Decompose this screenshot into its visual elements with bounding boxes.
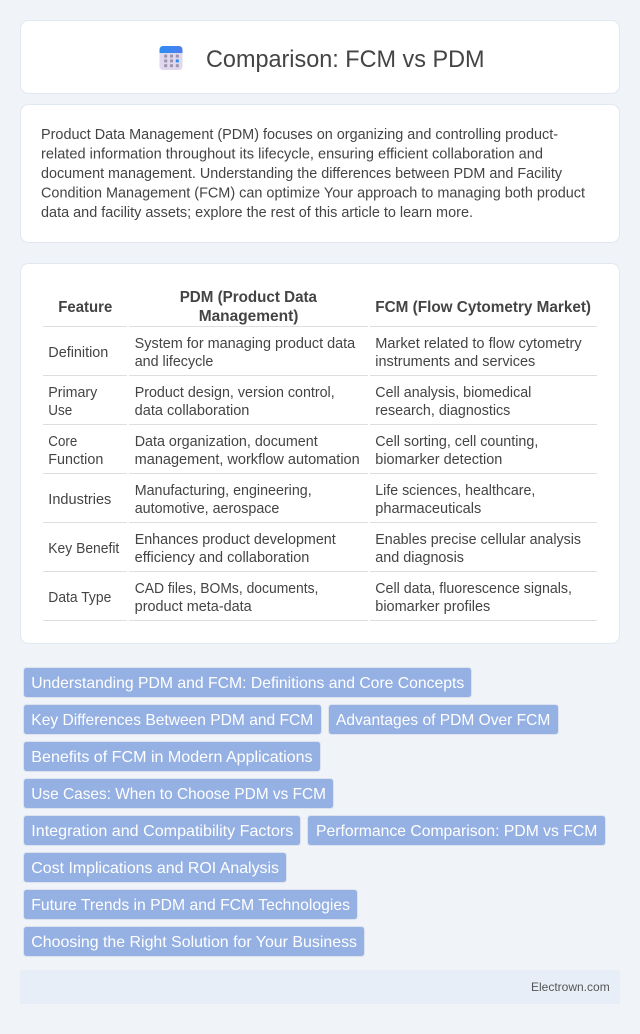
table row: Industries: Manufacturing, engineering, [135, 483, 312, 499]
footer: Electrown.com [531, 980, 610, 994]
table row: Primary Use: data collaboration [135, 403, 249, 419]
tag: key differences: Key Differences Between PDM and FCM [31, 712, 313, 729]
table header row: Management) [199, 308, 298, 325]
icon: calendar [160, 46, 182, 70]
tag: definitions [24, 668, 472, 698]
table row: Core Function: Cell sorting, cell counting, [375, 434, 538, 450]
tag: future trends: Future Trends in PDM and FCM Technologies [31, 897, 350, 914]
table row: Definition: Definition [48, 345, 108, 361]
table row: Core Function: management, workflow automation [135, 452, 360, 468]
table row: Definition: instruments and services [375, 354, 535, 370]
table row: Key Benefit: Key Benefit [48, 541, 119, 557]
title: Comparison: FCM vs PDM [206, 46, 484, 73]
table row: Key Benefit: Enables precise cellular analysis [375, 532, 581, 548]
table header row: PDM (Product Data [180, 289, 317, 306]
footer [20, 970, 620, 1004]
tag: integration: Integration and Compatibility Factors [31, 823, 293, 840]
tag: benefits: Benefits of FCM in Modern Applications [31, 749, 313, 766]
tag: key differences [24, 704, 322, 734]
panel: introduction [20, 104, 620, 242]
table row: Core Function: biomarker detection [375, 452, 502, 468]
table row: Core Function: Data organization, document [135, 434, 318, 450]
text block: intro paragraph: data and facility assets; explore the rest of this article to learn more. [41, 204, 473, 221]
table header row: FCM (Flow Cytometry Market) [375, 299, 591, 316]
table row: Primary Use: Primary [48, 385, 98, 401]
tag: integration [24, 816, 300, 846]
table row: Definition: Market related to flow cytometry [375, 336, 582, 352]
table row: Data Type: Data Type [48, 590, 111, 606]
panel: comparison table [20, 264, 620, 644]
tag: future trends [24, 890, 358, 920]
tag: performance: Performance Comparison: PDM vs FCM [316, 823, 597, 840]
tag: choosing [24, 926, 364, 956]
text block: intro paragraph: Condition Management (FCM) can optimize Your approach to managing both product [41, 184, 586, 202]
tag: performance [308, 816, 606, 846]
tag: advantages: Advantages of PDM Over FCM [336, 712, 550, 729]
table row: Key Benefit: efficiency and collaboration [135, 550, 309, 566]
table row: Data Type [48, 581, 572, 615]
table row: Core Function: Core [48, 434, 77, 450]
table row: Core Function [48, 434, 538, 468]
table row: Data Type: CAD files, BOMs, documents, [135, 581, 318, 597]
table row: Definition: System for managing product data [135, 336, 355, 352]
topic tags [24, 668, 606, 956]
table header row: Feature [58, 299, 112, 316]
tag: cost: Cost Implications and ROI Analysis [31, 860, 279, 877]
table row: Key Benefit: and diagnosis [375, 550, 464, 566]
tag: use cases: Use Cases: When to Choose PDM vs FCM [31, 786, 326, 803]
table row: Definition [48, 336, 582, 370]
table row: Primary Use: Product design, version control, [135, 385, 335, 401]
text block: intro paragraph: Product Data Management (PDM) focuses on organizing and controlling product- [41, 126, 558, 143]
tag: definitions: Understanding PDM and FCM: Definitions and Core Concepts [31, 675, 464, 692]
tag: choosing: Choosing the Right Solution for Your Business [31, 934, 357, 951]
tag: advantages [328, 704, 558, 734]
table row: Primary Use: research, diagnostics [375, 403, 510, 419]
text block: intro paragraph: document management. Understanding the differences between PDM and Facility [41, 165, 562, 182]
tag: use cases [24, 778, 334, 808]
table row: Key Benefit: Enhances product development [135, 532, 336, 548]
table row: Data Type: Cell data, fluorescence signals, [375, 581, 572, 597]
table row: Primary Use [48, 385, 531, 419]
table row: Data Type: biomarker profiles [375, 599, 490, 615]
table row: Data Type: product meta-data [135, 599, 252, 615]
table row: Definition: and lifecycle [135, 354, 213, 370]
table row: Key Benefit [48, 532, 581, 566]
tag: benefits [24, 742, 320, 772]
table row: Industries [48, 483, 535, 517]
table row: Primary Use: Cell analysis, biomedical [375, 385, 531, 401]
table header row [58, 289, 591, 325]
text block: intro paragraph: related information throughout its lifecycle, ensuring efficient collaboration and [41, 146, 543, 162]
table row: Primary Use: Use [48, 403, 72, 419]
panel: title header [20, 20, 620, 94]
table row: Industries: pharmaceuticals [375, 501, 481, 517]
table row: Industries: Life sciences, healthcare, [375, 483, 535, 499]
table row: Industries: automotive, aerospace [135, 501, 279, 517]
table row: Core Function: Function [48, 452, 103, 468]
table row: Industries: Industries [48, 492, 111, 508]
tag: cost [24, 852, 286, 882]
text block: intro paragraph [41, 126, 586, 221]
